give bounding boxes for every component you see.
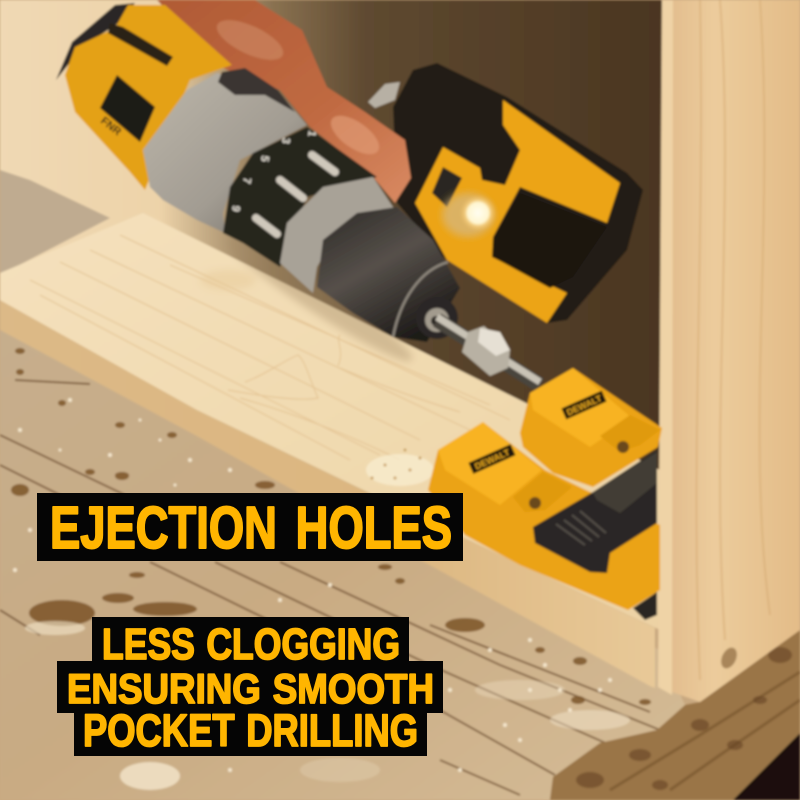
rear block pocket: [600, 415, 660, 452]
workbench rough front edge: [550, 630, 800, 800]
drill battery: [493, 193, 607, 288]
collar numbers: [229, 129, 318, 213]
clamp raised bar: [593, 452, 657, 513]
front DEWALT logo: DEWALT: [473, 447, 512, 472]
hand gripping drill: [157, 0, 411, 203]
drill FNR label: FNR: [98, 115, 123, 138]
drill rear cap: [56, 3, 135, 80]
drill shadow on board: [220, 228, 420, 372]
bench saw cuts: [0, 380, 660, 795]
drill yellow body: [65, 5, 232, 190]
right wooden panel: [658, 0, 800, 702]
black clamp plate: [533, 450, 657, 573]
rear DEWALT logo: DEWALT: [565, 393, 604, 418]
silver ring: [280, 177, 397, 293]
description text block: [57, 617, 443, 756]
sawdust pile on board: [366, 448, 434, 486]
drill vent window: [100, 75, 155, 142]
silver fitting: [368, 82, 400, 108]
rear drill hole: [617, 441, 629, 453]
chuck highlight band: [393, 262, 448, 337]
collar numbers: 7: [240, 176, 253, 185]
collar markings: [256, 155, 335, 234]
drill yellow housing: [415, 100, 620, 323]
description text block: POCKET DRILLING: [83, 705, 418, 756]
wooden board front edge: [0, 300, 655, 688]
chuck nose: [416, 297, 458, 339]
front DEWALT logo: [469, 444, 515, 474]
clamp ridges: [556, 511, 606, 545]
heading: ejection holes: EJECTION HOLES: [50, 495, 452, 561]
wooden board top face: [0, 213, 660, 630]
chuck: [317, 207, 460, 342]
lit area around LED: [442, 193, 494, 237]
gearbox handle: [218, 68, 295, 112]
description text block: LESS CLOGGING: [102, 620, 400, 669]
wood grain: [30, 235, 510, 460]
main drill: [56, 3, 460, 342]
drill bit and stop collar: [437, 317, 540, 385]
drill black strip: [108, 23, 173, 66]
rear block top face: [530, 368, 632, 447]
workbench top surface: [0, 320, 685, 800]
text callouts: [37, 493, 463, 756]
description text block: ENSURING SMOOTH: [67, 665, 434, 712]
front drill hole: [529, 497, 541, 509]
collar numbers: 3: [279, 136, 292, 145]
collar numbers: 1: [305, 129, 318, 138]
black speed collar: [223, 127, 377, 267]
front block top face: [438, 422, 542, 505]
collar numbers: 9: [229, 204, 242, 213]
collar numbers: 5: [258, 154, 271, 163]
front block pocket: [513, 472, 572, 512]
pocket-hole jig rear block: [520, 368, 662, 487]
drill window: [432, 167, 462, 207]
lower dark slot: [633, 592, 657, 620]
LED work light: [459, 194, 497, 232]
pocket-hole jig front block: [428, 422, 660, 620]
soft knot stain: [200, 270, 256, 290]
far workbench surface: [0, 170, 110, 275]
sawdust: [13, 398, 630, 790]
second drill behind: [368, 63, 643, 323]
drill grey gearbox: [143, 73, 307, 233]
workshop background: [0, 0, 800, 520]
bench gouges: [11, 348, 651, 705]
